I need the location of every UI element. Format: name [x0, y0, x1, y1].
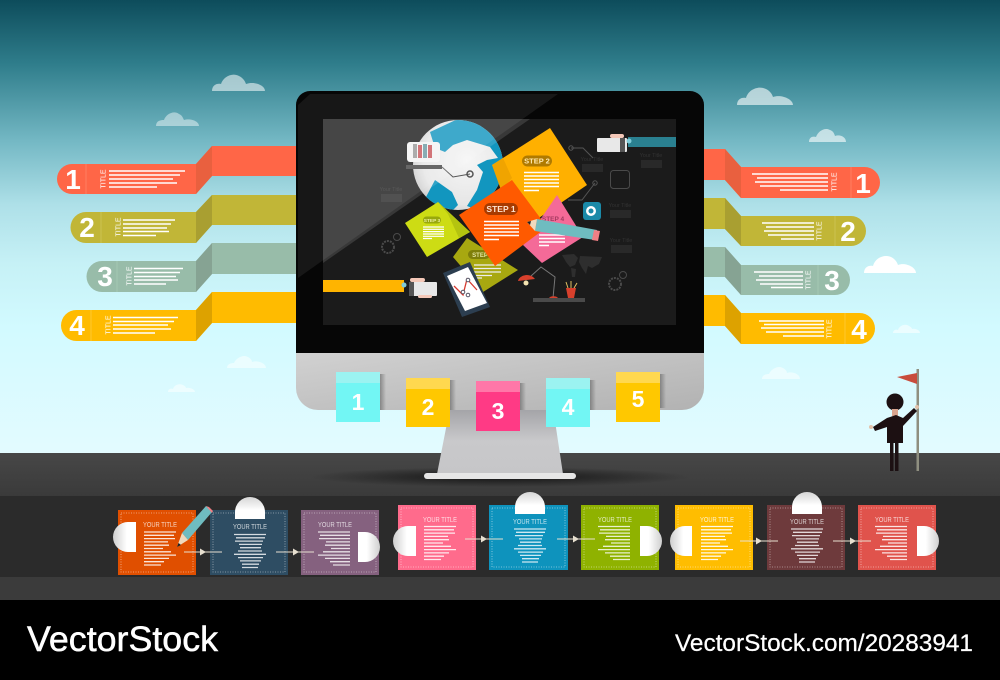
card 3 mauve	[301, 510, 380, 575]
monitor	[296, 91, 704, 479]
sticky note 5	[616, 372, 666, 422]
sticky note 3: 3	[492, 398, 504, 424]
ribbon 4 right	[703, 295, 875, 345]
bezel glare	[298, 94, 558, 278]
ribbon 2 right	[703, 198, 866, 247]
step 2 card: STEP 2	[524, 156, 550, 166]
sticky note 3	[476, 381, 526, 431]
ribbon 3 left	[86, 243, 297, 292]
screen faint labels	[380, 153, 662, 253]
ribbon 4 left: TITLE	[106, 315, 112, 335]
card row 3	[670, 492, 939, 570]
step 1 card	[459, 180, 547, 266]
card 1 orange: YOUR TITLE	[143, 522, 177, 529]
sky background	[0, 0, 1000, 455]
ribbon 3 right: 3	[824, 265, 840, 296]
sticky note 1	[336, 372, 386, 422]
pencil on card	[177, 506, 213, 547]
tablet	[443, 262, 490, 317]
card 7 yellow	[670, 505, 753, 570]
ribbon 1 left: 1	[65, 164, 81, 195]
card 2 navy	[210, 497, 288, 575]
right ribbons	[703, 149, 880, 345]
arrow 2 to 3	[276, 548, 314, 556]
arrow 8 to 9	[833, 538, 871, 544]
screen faint labels: Your Title	[609, 203, 631, 209]
hand with phone left	[323, 278, 437, 298]
footer bar	[0, 600, 1000, 680]
ribbon 2 left: TITLE	[116, 217, 122, 237]
step 3 card: STEP 3	[424, 218, 441, 224]
monitor bezel	[296, 91, 704, 353]
ribbon 1 right: TITLE	[832, 172, 838, 192]
pencil on screen	[527, 219, 600, 241]
card 4 pink: YOUR TITLE	[423, 517, 457, 524]
screen faint labels: Your Title	[640, 153, 662, 159]
world map	[562, 254, 602, 277]
man	[869, 394, 919, 471]
sticky note 1: 1	[352, 389, 365, 415]
ribbon 4 right: TITLE	[826, 319, 834, 339]
numbered sticky notes	[336, 372, 666, 431]
monitor shadow	[310, 467, 690, 487]
hand with phone top right	[597, 134, 676, 152]
card 6 green	[581, 505, 662, 570]
connector on globe	[442, 167, 473, 177]
bottom step cards	[113, 492, 939, 575]
left ribbons	[57, 146, 297, 341]
arrow 4 to 5	[465, 536, 503, 542]
ribbon 4 left: 4	[69, 310, 85, 341]
step 5 card	[453, 238, 518, 292]
ribbon 4 left	[61, 292, 297, 341]
screen	[323, 119, 676, 325]
card 2 navy: YOUR TITLE	[233, 524, 267, 531]
sticky note 2: 2	[422, 394, 434, 420]
card 4 pink	[393, 505, 476, 570]
arrow 1 to 2	[184, 548, 222, 556]
card row 1	[113, 497, 380, 575]
screen faint labels: Your Title	[581, 157, 603, 163]
ribbon 3 left: TITLE	[126, 266, 134, 286]
card 1 orange	[113, 510, 196, 575]
ribbon 1 right	[703, 149, 880, 199]
screen faint labels: Your Title	[380, 187, 402, 193]
card row 2	[393, 492, 662, 570]
card 9 red: YOUR TITLE	[875, 517, 909, 524]
ribbon 1 right: 1	[855, 168, 871, 199]
card 3 mauve: YOUR TITLE	[318, 522, 352, 529]
footer brand: VectorStock	[27, 620, 219, 659]
card 6 green: YOUR TITLE	[598, 517, 632, 524]
step 2 card	[492, 128, 587, 222]
step 3 card	[405, 202, 470, 257]
ribbon 2 right: TITLE	[816, 221, 824, 241]
screen faint labels: Your Title	[610, 238, 632, 244]
step 1 card: STEP 1	[486, 204, 516, 214]
ribbon 3 left: 3	[97, 261, 113, 292]
ribbon 2 right: 2	[840, 216, 856, 247]
icon: blue app	[583, 202, 601, 220]
card 7 yellow: YOUR TITLE	[700, 517, 734, 524]
desk lamp and pencil cup	[518, 267, 585, 302]
ribbon 1 left	[57, 146, 297, 195]
card 5 blue	[489, 492, 568, 570]
gears	[382, 234, 626, 290]
globe	[413, 118, 510, 210]
ribbon 3 right	[703, 247, 850, 296]
arrow 5 to 6	[557, 536, 595, 542]
step 4 card: STEP 4	[542, 216, 565, 223]
card 8 brown: YOUR TITLE	[790, 519, 824, 526]
step 4 card	[523, 195, 583, 263]
connector lines	[568, 146, 597, 200]
screen glare	[323, 119, 530, 263]
sticky note 5: 5	[632, 386, 645, 412]
card 5 blue: YOUR TITLE	[513, 519, 547, 526]
arrow 7 to 8	[740, 538, 778, 544]
card 9 red	[858, 505, 939, 570]
sticky note 2	[406, 378, 456, 427]
footer image id: VectorStock.com/20283941	[675, 630, 973, 657]
step 5 card: STEP	[472, 253, 488, 259]
sticky note 4	[546, 378, 596, 427]
clouds	[156, 75, 920, 392]
monitor stand	[437, 408, 563, 474]
icon: device outline	[610, 170, 630, 188]
ribbon 2 left	[70, 195, 297, 243]
flag	[897, 369, 919, 471]
books card	[406, 142, 442, 169]
bottom dark band	[0, 496, 1000, 577]
monitor chin	[296, 350, 704, 410]
monitor base	[424, 473, 576, 479]
man with flag	[869, 369, 919, 471]
ground shadow band	[0, 577, 1000, 600]
ribbon 4 right: 4	[851, 314, 867, 345]
ribbon 3 right: TITLE	[806, 270, 812, 290]
sticky note 4: 4	[562, 394, 575, 420]
ground	[0, 453, 1000, 497]
ribbon 2 left: 2	[79, 212, 95, 243]
card 8 brown	[767, 492, 845, 570]
ribbon 1 left: TITLE	[100, 169, 108, 189]
